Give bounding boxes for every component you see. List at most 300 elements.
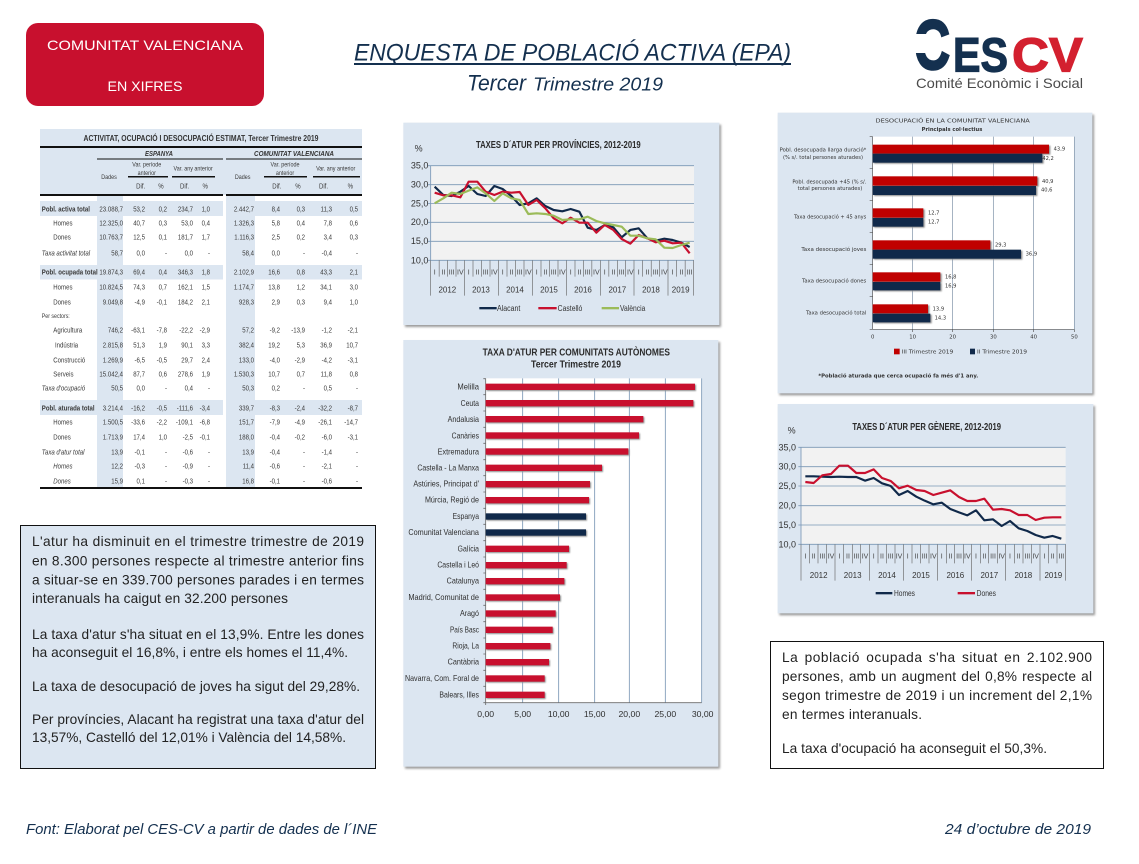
table: activitat, ocupació i desocupació: anterior (138, 171, 156, 177)
table row: Serveis: 1.530,3 (234, 371, 254, 379)
table row: Taxa dones: - (303, 478, 305, 486)
axis grid: províncies: III (687, 269, 693, 276)
logo: CES-CV: C (914, 6, 950, 84)
axis grid: províncies: III (619, 269, 625, 276)
table row: Dones: 0,2 (297, 234, 305, 242)
table row: Pobl. activa total: 0,2 (159, 206, 167, 214)
logo: CES-CV (912, 6, 1083, 91)
table row: Taxa d'ocupació: - (303, 385, 305, 393)
table row: Construcció: -4,2 (322, 357, 332, 365)
table row: Taxa activitat total: 0,0 (272, 250, 280, 258)
axis grid: gènere: IV (964, 554, 971, 561)
chart subheading: col·lectius: Principals col·lectius (922, 127, 982, 133)
table row: Dones: 1,7 (202, 234, 210, 242)
table row: Homes: 0,4 (297, 220, 305, 228)
table: activitat, ocupació i desocupació: % (295, 183, 301, 191)
axis grid: províncies: III (517, 269, 523, 276)
table row: Homes aturats: -26,1 (318, 419, 332, 427)
axis grid: gènere: I (1043, 554, 1045, 561)
table row: Taxa d'ocupació: 0,5 (324, 385, 332, 393)
axis grid: províncies: II (577, 269, 581, 276)
table row: Taxa d'ocupació: 0,2 (272, 385, 280, 393)
axis grid: gènere: 15,0 (778, 520, 796, 530)
table row: Dones ocupades: -4,9 (135, 299, 145, 307)
table row: Homes ocupats: 34,1 (320, 284, 332, 292)
table row: Taxa homes: -0,9 (183, 463, 193, 471)
table row: Indústria: 382,4 (239, 342, 254, 350)
text block: ocupació: La taxa d'ocupació ha aconseguit el 50,3%. (782, 741, 1047, 756)
category labels: desocupació: total persones aturades) (798, 186, 862, 192)
axis grid: comunitats autònomes: 25,00 (654, 709, 676, 719)
table row: Homes: 0,3 (159, 220, 167, 228)
axis grid: gènere: I (1009, 554, 1011, 561)
table row: Dones aturades: Dones (53, 434, 71, 442)
table row: Taxa activitat total: - (165, 250, 167, 258)
table row: Taxa homes: -0,3 (135, 463, 145, 471)
chart heading: comunitats autònomes (483, 346, 670, 371)
table row: Pobl. aturada total: 3.214,4 (103, 405, 123, 413)
table row: Taxa dones: -0,3 (183, 478, 193, 486)
axis grid: desocupació: 0 (871, 335, 875, 341)
axis grid: gènere: % (788, 426, 796, 436)
legend: gènere: Dones (977, 589, 996, 598)
table row: Taxa d'atur total: -1,4 (322, 449, 332, 457)
title: Tercer (467, 70, 528, 96)
table row: Pobl. aturada total: -16,2 (131, 405, 145, 413)
table row: Homes aturats: -7,9 (270, 419, 280, 427)
axis grid: gènere: III (956, 554, 962, 561)
table: activitat, ocupació i desocupació: Dif. (319, 183, 328, 191)
table row: Taxa dones: 16,8 (242, 478, 254, 486)
table row: Pobl. ocupada total: 69,4 (133, 269, 145, 277)
axis grid: gènere: II (880, 554, 884, 561)
table row: Taxa homes: - (356, 463, 358, 471)
axis grid: províncies: II (441, 269, 445, 276)
text block: ocupació: segon trimestre de 2019 i un increment del 2,1% (782, 688, 1092, 703)
axis grid: províncies: 25,0 (411, 198, 428, 208)
value labels: desocupació: 16,9 (945, 284, 956, 290)
table row: Construcció: 29,7 (181, 357, 193, 365)
table row: Pobl. ocupada total: 346,3 (178, 269, 193, 277)
chart panel: desocupació en la Comunitat Valenciana (778, 113, 1092, 393)
category labels: comunitats autònomes: País Basc (450, 624, 479, 634)
chart heading: comunitats autònomes: Tercer Trimestre 2019 (531, 360, 622, 371)
text block: atur: en 8.300 persones respecte al trimestre anterior fins (32, 554, 364, 568)
legend: trimestres: III Trimestre 2019 (902, 349, 953, 355)
category labels: comunitats autònomes: Aragó (460, 608, 479, 618)
table row: Taxa activitat total: - (356, 250, 358, 258)
table row: Agricultura: -2,9 (200, 327, 210, 335)
table row: Taxa d'atur total: -0,1 (135, 449, 145, 457)
table row: Homes ocupats: 10.824,5 (99, 284, 123, 292)
axis grid: gènere: 20,0 (778, 500, 796, 510)
table row: Serveis: 11,8 (321, 371, 332, 379)
table: activitat, ocupació i desocupació: COMUNITAT VALENCIANA (254, 151, 334, 158)
table row: Serveis: 0,8 (350, 371, 358, 379)
table row: Taxa dones: -0,1 (270, 478, 280, 486)
axis grid: desocupació: 30 (990, 335, 997, 341)
table row: Pobl. aturada total: -32,2 (318, 405, 332, 413)
category labels: desocupació (780, 147, 867, 317)
category labels: desocupació: Taxa desocupació + 45 anys (793, 214, 867, 221)
table row: Dones aturades: -3,1 (348, 434, 358, 442)
table row: Taxa d'atur total: 13,9 (242, 449, 254, 457)
table row: Indústria: 3,3 (202, 342, 210, 350)
legend: províncies: Castelló (558, 304, 583, 313)
axis grid: províncies: IV (525, 269, 532, 276)
table row: Dones ocupades: 184,2 (178, 299, 193, 307)
table row: Taxa d'ocupació: - (208, 385, 210, 393)
text block: ocupació: en termes interanuals. (782, 707, 922, 722)
category labels: comunitats autònomes: Astúries, Principat d' (413, 478, 479, 488)
axis grid: províncies: II (509, 269, 513, 276)
table row: Homes aturats: -4,9 (295, 419, 305, 427)
table row: Homes ocupats: 1,2 (297, 284, 305, 292)
axis grid: províncies: I (672, 269, 674, 276)
table row: Taxa activitat total: - (303, 250, 305, 258)
table row: Agricultura: -2,1 (348, 327, 358, 335)
category labels: desocupació: Pobl. desocupada llarga duració* (780, 147, 867, 154)
axis grid: gènere: 2017 (980, 571, 999, 580)
legend: gènere: Homes (894, 589, 915, 598)
table row: Pobl. aturada total: -8,3 (270, 405, 280, 413)
axis grid: gènere: II (914, 554, 918, 561)
footer: font: Font: Elaborat pel CES-CV a partir de dades de l´INE (26, 822, 377, 838)
axis grid: gènere: III (819, 554, 825, 561)
table row: Taxa d'atur total: - (165, 449, 167, 457)
axis grid: gènere: III (990, 554, 996, 561)
table row: Construcció: -6,5 (135, 357, 145, 365)
legend: províncies: Alacant (497, 304, 521, 313)
table row: Dones: 12,5 (133, 234, 145, 242)
table row: Homes aturats: Homes (53, 419, 73, 427)
table row: Dones ocupades: 1,0 (350, 299, 358, 307)
axis grid: províncies: II (611, 269, 615, 276)
table row: Homes aturats: 151,7 (239, 419, 254, 427)
table row: Pobl. ocupada total: 19.874,3 (99, 269, 123, 277)
axis grid: províncies: % (415, 143, 423, 153)
badge: Comunitat Valenciana en xifres: EN XIFRES (108, 78, 182, 94)
table row: Pobl. ocupada total: 1,8 (202, 269, 210, 277)
bars: comunitats autònomes (486, 384, 695, 698)
legend: trimestres: II Trimestre 2019 (977, 349, 1027, 355)
table row: Agricultura: -7,8 (157, 327, 167, 335)
table row: Pobl. ocupada total: 2,1 (350, 269, 358, 277)
axis grid: províncies: 35,0 (411, 161, 428, 171)
table row: Indústria: 19,2 (268, 342, 280, 350)
axis grid: gènere: III (853, 554, 859, 561)
table row: Serveis: 0,7 (297, 371, 305, 379)
axis grid: províncies: I (604, 269, 606, 276)
logo: CES-CV: Comité Econòmic i Social (916, 75, 1083, 91)
text block: ocupació: persones, amb un augment del 0,8% respecte al (782, 669, 1092, 684)
table row: Taxa activitat total: Taxa activitat total (42, 250, 90, 258)
axis grid: gènere: I (941, 554, 943, 561)
table: activitat, ocupació i desocupació (40, 129, 362, 489)
category labels: comunitats autònomes: Canàries (452, 430, 480, 440)
table row: Taxa dones: -0,6 (322, 478, 332, 486)
table row: Taxa d'atur total: - (208, 449, 210, 457)
axis grid: gènere: IV (828, 554, 835, 561)
text block: atur: a situar-se en 339.700 persones parades i en termes (32, 572, 364, 588)
category labels: comunitats autònomes: Rioja, La (452, 641, 479, 651)
axis grid: gènere: 35,0 (778, 442, 796, 452)
value labels: desocupació: 40,6 (1041, 188, 1052, 194)
table row: Taxa d'atur total: - (356, 449, 358, 457)
value labels: desocupació: 43,9 (1054, 147, 1065, 153)
table: activitat, ocupació i desocupació: ESPANYA (145, 151, 173, 158)
axis grid: gènere: 2015 (912, 571, 930, 580)
table row: Taxa homes: - (165, 463, 167, 471)
table row: Per sectors: Per sectors: (42, 314, 70, 320)
table row: Indústria: 36,9 (320, 342, 332, 350)
table row: Dones: 3,4 (324, 234, 332, 242)
chart panel: taxes d'atur per províncies (403, 123, 719, 325)
table row: Dones ocupades: 9.049,8 (103, 299, 123, 307)
table: activitat, ocupació i desocupació: % (348, 183, 353, 191)
axis grid: gènere: II (1051, 554, 1055, 561)
table row: Agricultura: -63,1 (131, 327, 145, 335)
axis grid: desocupació: 50 (1071, 335, 1078, 341)
table row: Dones ocupades: Dones (53, 299, 71, 307)
table row: Pobl. activa total: 23.088,7 (99, 206, 123, 214)
axis grid: províncies: 2016 (574, 286, 592, 295)
table row: Serveis: 0,6 (159, 371, 167, 379)
text block: atur: Per províncies, Alacant ha registrat una taxa d'atur del (32, 712, 364, 727)
table row: Taxa d'ocupació: - (356, 385, 358, 393)
table row: Indústria: 51,3 (133, 342, 145, 350)
value labels: desocupació: 29,3 (995, 242, 1006, 248)
text block: ocupació: La població ocupada s'ha situat en 2.102.900 (782, 650, 1092, 665)
table row: Pobl. activa total: 1,0 (202, 206, 210, 214)
axis grid: comunitats autònomes: 20,00 (618, 709, 640, 719)
table: activitat, ocupació i desocupació: Var. any anterior (174, 166, 213, 173)
axis grid: gènere: II (982, 554, 986, 561)
table row: Homes aturats: -2,2 (157, 419, 167, 427)
legend: províncies (479, 304, 646, 313)
table row: Pobl. activa total: 234,7 (178, 206, 193, 214)
category labels: desocupació: Taxa desocupació total (805, 310, 866, 317)
value labels: desocupació: 36,9 (1026, 251, 1037, 257)
table row: Dones: 2,5 (272, 234, 280, 242)
footer: data: 24 d’octubre de 2019 (944, 822, 1091, 838)
table row: Taxa homes: - (208, 463, 210, 471)
text block: atur (20, 526, 376, 768)
axis grid: comunitats autònomes: 10,00 (548, 709, 570, 719)
table row: Serveis: 10,7 (268, 371, 280, 379)
table row: Homes ocupats: 13,8 (268, 284, 280, 292)
line: Dones (805, 466, 1061, 520)
axis grid: gènere: III (1058, 554, 1064, 561)
table row: Indústria: 1,9 (159, 342, 167, 350)
table: activitat, ocupació i desocupació: Dif. (272, 183, 281, 191)
table row: Taxa dones: Dones (53, 478, 71, 486)
table row: Taxa homes: -0,6 (270, 463, 280, 471)
table: activitat, ocupació i desocupació: Var. període (132, 162, 162, 169)
table row: Taxa d'ocupació: 50,3 (242, 385, 254, 393)
table row: Dones aturades: 188,0 (239, 434, 254, 442)
axis grid: gènere: 2016 (946, 571, 965, 580)
text block: atur: ha aconseguit el 16,8%, i entre els homes el 11,4%. (32, 645, 348, 660)
axis grid: províncies: 2015 (540, 286, 558, 295)
axis grid: gènere: IV (998, 554, 1005, 561)
table: activitat, ocupació i desocupació: % (158, 183, 164, 191)
logo: CES-CV: CV (1012, 30, 1083, 82)
axis grid: províncies: IV (593, 269, 600, 276)
table row: Pobl. aturada total: -2,4 (295, 405, 305, 413)
table row: Homes aturats: -109,1 (176, 419, 193, 427)
logo: CES-CV: ES (953, 30, 1008, 82)
title: ENQUESTA DE POBLACIÓ ACTIVA (EPA) (354, 40, 791, 66)
category labels: comunitats autònomes: Múrcia, Regió de (425, 495, 479, 505)
table row: Taxa d'ocupació: 0,0 (137, 385, 145, 393)
table row: Agricultura: -1,2 (322, 327, 332, 335)
bars: II Trimestre 2019 (873, 154, 1042, 322)
table row: Homes ocupats: Homes (53, 284, 73, 292)
table row: Dones ocupades: 2,1 (202, 299, 210, 307)
table row: Dones aturades: -0,2 (295, 434, 305, 442)
axis grid: gènere: IV (1032, 554, 1039, 561)
table row: Homes ocupats: 1,5 (202, 284, 210, 292)
category labels: comunitats autònomes: Castella - La Manxa (417, 462, 479, 472)
category labels: comunitats autònomes: Castella i Leó (437, 560, 479, 570)
table row: Construcció: -0,5 (157, 357, 167, 365)
table row: Taxa homes: -2,1 (322, 463, 332, 471)
value labels: desocupació: 42,2 (1042, 156, 1054, 162)
table: activitat, ocupació i desocupació: ACTIVITAT, OCUPACIÓ I DESOCUPACIÓ ESTIMAT, Tercer Trimestre 2019 (84, 132, 319, 143)
table: activitat, ocupació i desocupació: Dif. (136, 183, 145, 191)
table row: Agricultura: -9,2 (270, 327, 280, 335)
title (354, 40, 791, 96)
axis grid: gènere: II (846, 554, 850, 561)
legend: províncies: València (620, 304, 646, 313)
table row: Dones: 0,3 (350, 234, 358, 242)
table row: Taxa homes: Homes (53, 463, 73, 471)
axis grid: províncies: 15,0 (411, 236, 428, 246)
chart heading: desocupació: DESOCUPACIÓ EN LA COMUNITAT VALENCIANA (875, 118, 1030, 125)
axis grid: desocupació: 20 (949, 335, 957, 341)
category labels: comunitats autònomes: Andalusia (448, 414, 479, 424)
text block: atur: interanuals ha caigut en 32.200 persones (32, 591, 288, 606)
category labels: comunitats autònomes: Melilla (457, 381, 479, 391)
line: Alacant (435, 186, 690, 247)
axis grid: gènere: II (948, 554, 952, 561)
text block: atur: L'atur ha disminuit en el trimestre trimestre de 2019 (32, 534, 364, 549)
axis grid: províncies: II (679, 269, 683, 276)
table row: Agricultura: 746,2 (108, 327, 123, 335)
table row: Taxa activitat total: 58,4 (242, 250, 254, 258)
table row: Pobl. ocupada total: 43,3 (320, 269, 332, 277)
table row: Taxa d'atur total: Taxa d'atur total (42, 449, 85, 457)
table row: Dones ocupades: 2,9 (272, 299, 280, 307)
axis grid: províncies: 2017 (608, 286, 627, 295)
table row: Dones: 0,1 (159, 234, 167, 242)
table: activitat, ocupació i desocupació: Dades (101, 175, 117, 181)
table: activitat, ocupació i desocupació: Var. període (271, 162, 300, 169)
axis grid: gènere: 2012 (810, 571, 828, 580)
table row: Construcció: 1.269,9 (103, 357, 123, 365)
axis grid: desocupació: 10 (909, 335, 917, 341)
axis grid: províncies: 2013 (472, 286, 490, 295)
axis grid: províncies: IV (457, 269, 464, 276)
table row: Homes ocupats: 3,0 (350, 284, 358, 292)
table row: Taxa dones: 15,9 (111, 478, 123, 486)
chart heading: províncies: TAXES D´ATUR PER PROVÍNCIES, 2012-2019 (476, 140, 641, 151)
table row: Pobl. activa total: 53,2 (133, 206, 145, 214)
table row: Serveis: 1,9 (202, 371, 210, 379)
axis grid: comunitats autònomes: 30,00 (692, 709, 714, 719)
table row: Serveis: Serveis (53, 371, 74, 379)
table row: Taxa homes: 12,2 (111, 463, 123, 471)
table row: Pobl. aturada total: -3,4 (200, 405, 210, 413)
table row: Pobl. aturada total: Pobl. aturada total (42, 405, 95, 413)
axis grid: províncies: III (653, 269, 659, 276)
axis grid: gènere: I (975, 554, 977, 561)
table row: Dones: 181,7 (178, 234, 193, 242)
axis grid: comunitats autònomes: 0,00 (477, 709, 494, 719)
table row: Dones ocupades: 9,4 (324, 299, 332, 307)
line: València (435, 187, 690, 248)
table row: Taxa activitat total: 0,0 (137, 250, 145, 258)
table row: Taxa activitat total: -0,4 (322, 250, 332, 258)
category labels: desocupació: Taxa desocupació joves (800, 246, 867, 253)
table row: Homes ocupats: 162,1 (178, 284, 193, 292)
table row: Construcció: -2,9 (295, 357, 305, 365)
axis grid: províncies: 2014 (506, 286, 524, 295)
table row: Homes: 7,8 (324, 220, 332, 228)
text block: atur: La taxa d'atur s'ha situat en el 13,9%. Entre les dones (32, 627, 364, 642)
table row: Homes ocupats: 0,7 (159, 284, 167, 292)
axis grid: gènere: 2013 (844, 571, 862, 580)
axis grid: gènere: I (838, 554, 840, 561)
axis grid: províncies: 2019 (672, 286, 690, 295)
table row: Dones aturades: 17,4 (133, 434, 145, 442)
table row: Homes: 53,0 (181, 220, 193, 228)
table row: Homes: Homes (53, 220, 73, 228)
table row: Pobl. aturada total: -8,7 (348, 405, 358, 413)
table: activitat, ocupació i desocupació: Var. any anterior (316, 166, 355, 173)
axis grid: províncies: III (483, 269, 489, 276)
text block: ocupació (770, 642, 1104, 768)
table row: Agricultura: Agricultura (53, 327, 82, 335)
axis grid: províncies: III (449, 269, 455, 276)
chart heading: gènere: TAXES D´ATUR PER GÈNERE, 2012-2019 (852, 422, 1001, 433)
axis grid: desocupació: 40 (1030, 335, 1038, 341)
line: Homes (805, 476, 1061, 539)
table row: Taxa d'atur total: -0,4 (270, 449, 280, 457)
category labels: desocupació: Taxa desocupació dones (801, 278, 867, 285)
table row: Agricultura: -22,2 (179, 327, 193, 335)
axis grid: gènere: IV (896, 554, 903, 561)
table row: Taxa d'ocupació: - (165, 385, 167, 393)
table row: Pobl. aturada total: -111,6 (177, 405, 193, 413)
value labels: desocupació: 13,9 (933, 307, 944, 313)
category labels: desocupació: (% s/. total persones aturades) (783, 155, 863, 161)
badge: Comunitat Valenciana en xifres (26, 23, 264, 106)
table row: Construcció: -3,1 (348, 357, 358, 365)
table row: Taxa d'atur total: -0,6 (183, 449, 193, 457)
table row: Pobl. activa total: 0,3 (297, 206, 305, 214)
table row: Dones: Dones (53, 234, 71, 242)
value labels: desocupació: 40,9 (1042, 179, 1053, 185)
axis grid: gènere: I (804, 554, 806, 561)
axis grid: gènere: 10,0 (778, 539, 796, 549)
legend: gènere (876, 589, 996, 598)
chart panel: taxes d'atur per gènere (778, 404, 1093, 613)
table row: Construcció: 2,4 (202, 357, 210, 365)
table row: Dones: 10.763,7 (99, 234, 123, 242)
axis grid: províncies: 20,0 (411, 217, 428, 227)
